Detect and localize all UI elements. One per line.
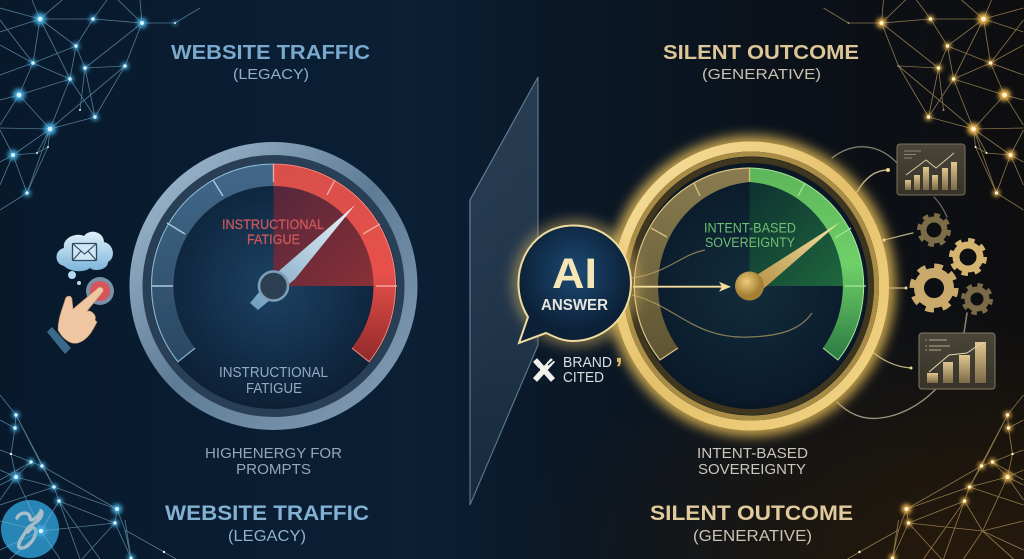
icon: small gear — [964, 286, 990, 312]
arrow: answer into gauge — [633, 282, 731, 292]
text: intent-based sovereignty: INTENT-BASED — [697, 445, 808, 462]
chart: legacy gauge — [130, 142, 418, 430]
text: intent-based sovereignty — [697, 445, 808, 478]
icon: bottom chart card — [919, 333, 995, 389]
label: intent-based sovereignty green — [704, 220, 796, 250]
red sector — [274, 186, 374, 286]
icon: corner logo — [1, 500, 59, 558]
heading: website traffic top: (LEGACY) — [233, 66, 309, 83]
icon: hand pressing button with email thought — [47, 232, 114, 354]
text: high energy for prompts — [205, 445, 342, 478]
text: high energy for prompts: HIGHENERGY FOR — [205, 445, 342, 462]
heading: website traffic bottom: (LEGACY) — [228, 528, 306, 545]
gauge ticks — [152, 180, 223, 286]
needle — [250, 205, 355, 310]
label: intent-based sovereignty green: SOVEREIGNTY — [705, 235, 795, 250]
label: instructional fatigue — [219, 365, 328, 397]
text: intent-based sovereignty: SOVEREIGNTY — [698, 461, 806, 478]
text: answer: ANSWER — [541, 297, 608, 314]
callout: AI answer bubble — [512, 219, 640, 347]
text: high energy for prompts: PROMPTS — [236, 461, 311, 478]
icon: large gear — [913, 267, 955, 309]
green sector — [750, 182, 850, 286]
hub — [259, 272, 288, 300]
gauge bezel — [618, 146, 884, 426]
heading: silent outcome bottom — [650, 502, 853, 545]
green arc — [750, 168, 864, 360]
icon: thought cloud — [56, 232, 113, 285]
network: bottom right — [848, 395, 1024, 559]
brand cited label: , — [615, 337, 623, 368]
heading: website traffic bottom: WEBSITE TRAFFIC — [165, 502, 369, 525]
heading: silent outcome top: (GENERATIVE) — [702, 66, 821, 83]
chart: generative gauge — [615, 144, 887, 428]
heading: silent outcome bottom: (GENERATIVE) — [693, 528, 812, 545]
connector end dots — [882, 168, 912, 370]
icon: bright gear — [952, 241, 984, 273]
panel: glass divider — [469, 77, 538, 505]
brand cited label: BRAND — [563, 355, 612, 371]
heading: silent outcome top: SILENT OUTCOME — [663, 41, 859, 64]
gauge bezel — [130, 142, 418, 430]
label: instructional fatigue red — [222, 217, 324, 247]
network: top left — [0, 0, 200, 210]
brand cited label — [532, 337, 623, 386]
heading: silent outcome bottom: SILENT OUTCOME — [650, 502, 853, 525]
needle — [752, 222, 840, 290]
heading: website traffic bottom — [165, 502, 369, 545]
network: top right — [824, 0, 1024, 210]
icon: gears — [913, 216, 990, 312]
label: instructional fatigue: INSTRUCTIONAL — [219, 365, 328, 381]
icon: top chart card — [897, 144, 965, 195]
gauge glow — [615, 144, 887, 428]
gold arc — [634, 168, 750, 360]
heading: silent outcome top — [663, 41, 859, 83]
icon: brand mark — [532, 358, 556, 382]
icon: red button — [86, 277, 114, 305]
label: instructional fatigue red: INSTRUCTIONAL — [222, 217, 324, 232]
gauge ticks — [651, 168, 750, 237]
network: bottom left — [0, 395, 176, 559]
blue arc — [151, 164, 274, 362]
flow curves — [632, 250, 812, 337]
icon: hand — [47, 287, 103, 354]
text: AI: AI — [552, 250, 597, 298]
label: instructional fatigue: FATIGUE — [246, 381, 302, 397]
label: intent-based sovereignty green: INTENT-BASED — [704, 220, 796, 236]
heading: website traffic top: WEBSITE TRAFFIC — [171, 41, 370, 64]
label: instructional fatigue red: FATIGUE — [247, 232, 300, 247]
red arc — [274, 164, 396, 362]
icon: upper gear — [920, 216, 948, 244]
connector curves — [832, 147, 967, 418]
hub — [735, 272, 764, 300]
brand cited label: CITED — [563, 370, 604, 386]
heading: website traffic top — [171, 41, 370, 83]
